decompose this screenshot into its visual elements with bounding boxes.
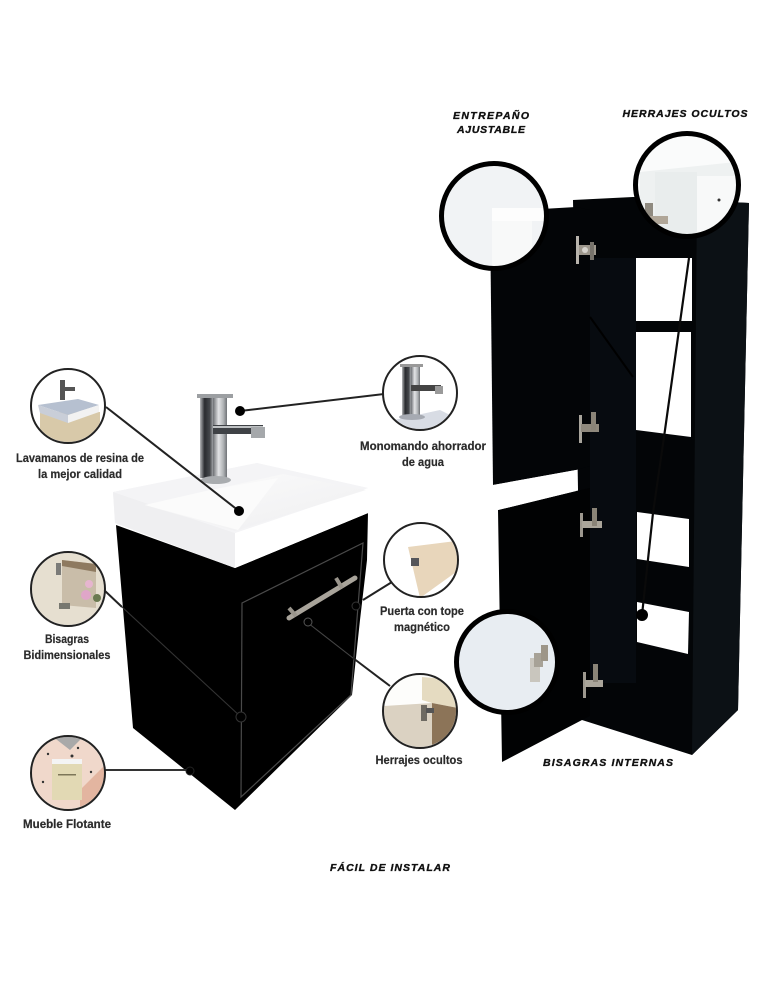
thumbnail ring xyxy=(31,369,105,443)
caption: easy to install: FÁCIL DE INSTALAR xyxy=(330,861,450,874)
detail ring xyxy=(442,164,546,268)
heading xyxy=(453,109,529,136)
callout: magnetic door stop xyxy=(352,523,464,634)
detail: adjustable shelf xyxy=(440,109,548,271)
label: Bidimensionales xyxy=(24,648,111,662)
label: Bisagras xyxy=(45,632,89,646)
small vanity cabinet xyxy=(113,394,368,810)
cabinet door outline xyxy=(241,543,363,797)
label xyxy=(380,604,464,634)
thumbnail ring xyxy=(31,552,105,626)
right side panel xyxy=(692,200,749,755)
detail ring xyxy=(636,134,738,236)
callout line: hinges xyxy=(642,258,689,615)
label xyxy=(16,451,144,481)
open niche 3 xyxy=(637,512,689,567)
back panel xyxy=(590,258,636,683)
heading: AJUSTABLE xyxy=(456,124,526,136)
callout line on cabinet xyxy=(308,623,353,658)
hinge 2 xyxy=(579,412,599,443)
thumbnail ring xyxy=(31,736,105,810)
callout dot: hinges xyxy=(636,609,648,621)
callout marker xyxy=(352,602,360,610)
detail ring xyxy=(456,612,558,712)
callout: faucet xyxy=(235,356,486,469)
hinge 4 xyxy=(583,664,603,698)
label xyxy=(360,439,486,469)
callout line: shelf xyxy=(590,317,633,377)
callout: hidden hardware xyxy=(304,618,463,767)
door handle xyxy=(289,578,355,618)
callout dot xyxy=(235,406,245,416)
callout line xyxy=(353,658,390,686)
white gap between doors xyxy=(493,470,576,510)
callout line xyxy=(240,394,384,411)
tall cabinet xyxy=(490,197,749,762)
callout marker xyxy=(186,767,194,775)
heading: BISAGRAS INTERNAS xyxy=(543,757,673,769)
label: Monomando ahorrador xyxy=(360,439,486,453)
open niche 1 xyxy=(636,258,692,321)
detail: internal hinges xyxy=(455,610,673,769)
callout marker xyxy=(236,712,246,722)
callout dot xyxy=(234,506,244,516)
thumbnail ring xyxy=(384,523,458,597)
resin washbasin xyxy=(113,463,368,568)
thumbnail: door stop xyxy=(408,542,457,596)
callout: floating cabinet xyxy=(23,735,194,831)
cabinet body xyxy=(116,513,368,810)
callout marker xyxy=(304,618,312,626)
callout line xyxy=(363,582,392,600)
callout: hinges xyxy=(24,551,246,722)
carcase xyxy=(573,197,749,755)
heading: HERRAJES OCULTOS xyxy=(622,108,748,120)
callout line xyxy=(104,590,122,607)
thumbnail ring xyxy=(383,356,457,430)
single-lever faucet xyxy=(197,394,265,484)
heading: ENTREPAÑO xyxy=(453,109,529,122)
detail photo xyxy=(444,166,544,266)
thumbnail: floating cabinet xyxy=(32,737,104,809)
open niche 4 xyxy=(637,602,689,654)
thumbnail: washbasin xyxy=(38,380,100,442)
hinge 1 xyxy=(576,236,596,264)
callout: washbasin xyxy=(16,368,244,516)
thumbnail ring xyxy=(383,674,457,748)
label: Mueble Flotante xyxy=(23,817,111,831)
label: la mejor calidad xyxy=(38,467,122,481)
label: magnético xyxy=(394,620,450,634)
label: Herrajes ocultos xyxy=(376,753,463,767)
detail photo xyxy=(459,614,555,710)
thumbnail: hinges xyxy=(32,553,104,625)
label: Puerta con tope xyxy=(380,604,464,618)
label: de agua xyxy=(402,455,444,469)
upper door xyxy=(490,207,590,485)
hinge 3 xyxy=(580,508,602,537)
callout line xyxy=(106,407,239,511)
thumbnail: hidden hardware xyxy=(384,677,456,747)
detail photo xyxy=(640,162,735,234)
thumbnail: faucet xyxy=(384,364,449,429)
label xyxy=(24,632,111,662)
callout line xyxy=(105,769,187,771)
detail: hidden hardware xyxy=(622,108,748,240)
callout line on cabinet xyxy=(122,607,241,717)
open niche 2 xyxy=(636,332,691,437)
infographic canvas xyxy=(16,110,749,872)
lower door xyxy=(498,488,590,762)
label: Lavamanos de resina de xyxy=(16,451,144,465)
